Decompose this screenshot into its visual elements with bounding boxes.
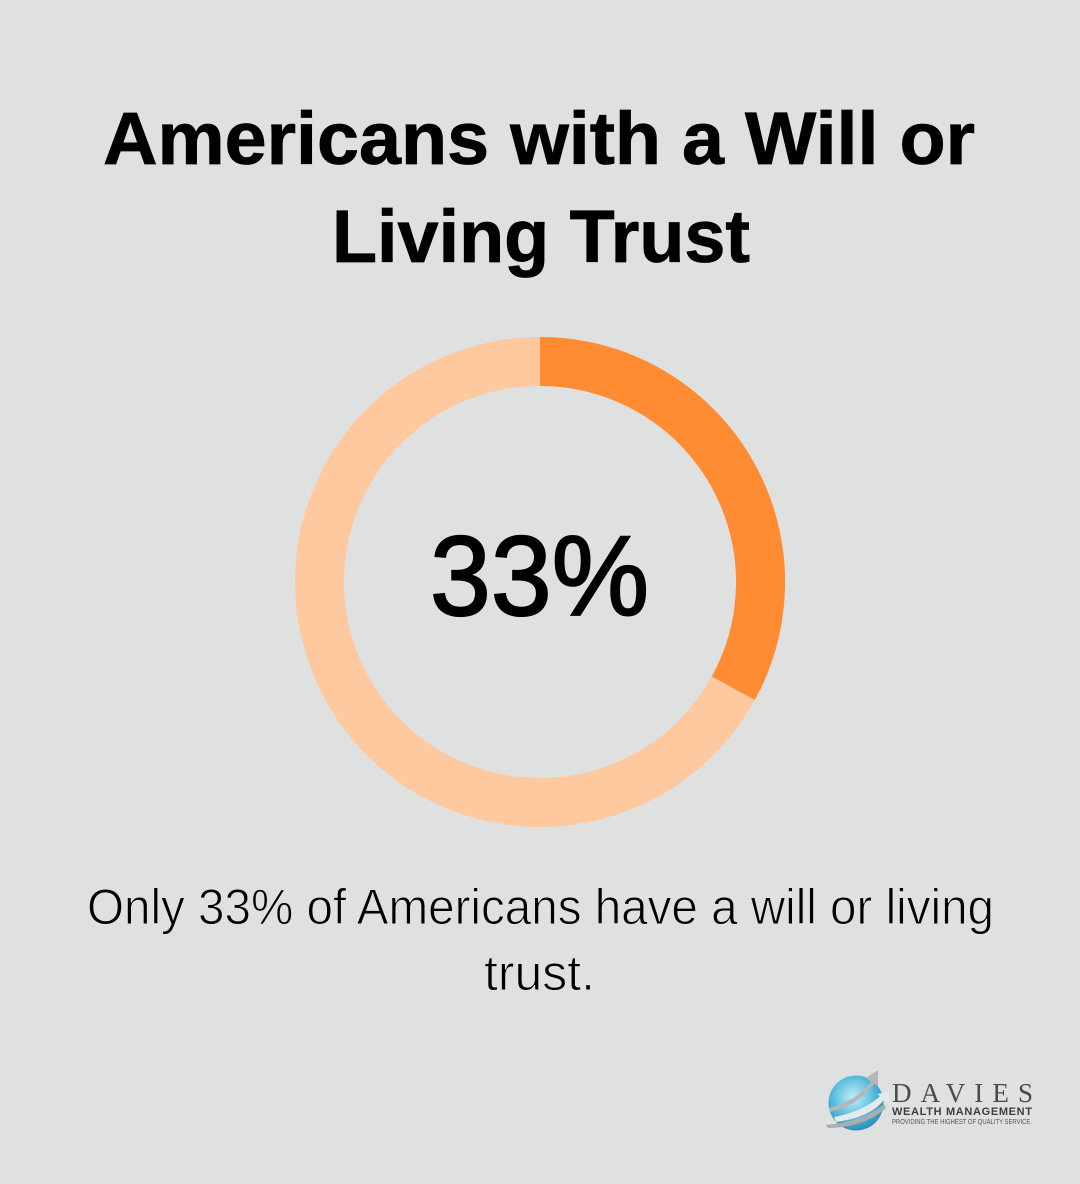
logo: Davies Wealth Management [826,1070,1033,1130]
center value: 33% [430,513,649,639]
wordmark: DAVIES: DAVIES [892,1078,1033,1108]
wordmark: WEALTH MANAGEMENT: WEALTH MANAGEMENT [892,1106,1032,1118]
tagline: PROVIDING THE HIGHEST OF QUALITY SERVICE. [892,1119,1032,1126]
title [103,97,975,278]
title: Living Trust [332,195,750,278]
description text: Only 33% of Americans have a will or living [87,879,994,935]
title: Americans with a Will or [103,97,975,180]
description text [87,879,994,1001]
donut chart: 33% [320,362,761,802]
icon: globe with arrows [826,1070,889,1130]
description text: trust. [484,945,595,1001]
